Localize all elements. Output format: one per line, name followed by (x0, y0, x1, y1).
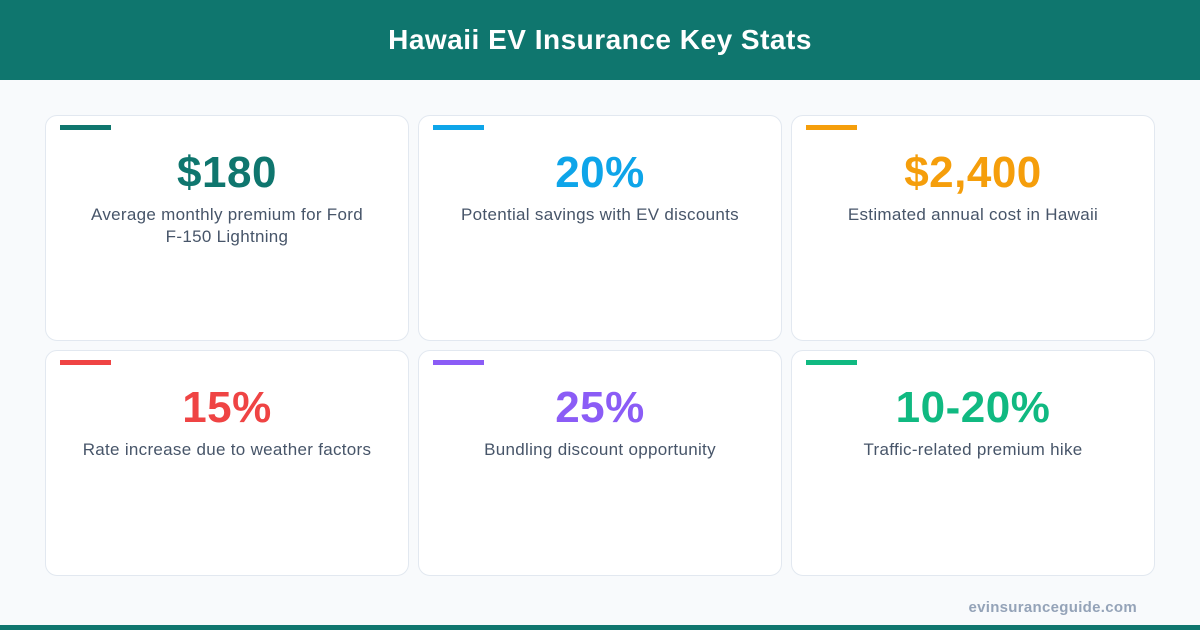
card: 15%: Rate increase due to weather factors (83, 440, 371, 459)
card: 20%: 20% (555, 148, 645, 197)
card: 25%: Bundling discount opportunity (484, 440, 716, 459)
card: 10-20%: Traffic-related premium hike (863, 440, 1083, 459)
card: $180: $180 (177, 148, 277, 197)
header: Hawaii EV Insurance Key Stats (388, 24, 812, 55)
header (0, 0, 1200, 80)
card: 20% (418, 115, 782, 341)
card: $180: Average monthly premium for Ford (91, 205, 363, 224)
card: $180: F-150 Lightning (166, 227, 288, 246)
card: $2,400: Estimated annual cost in Hawaii (848, 205, 1098, 224)
card: 15%: 15% (182, 383, 272, 432)
card: 15% (45, 350, 409, 576)
card: 25% (418, 350, 782, 576)
card: 20%: Potential savings with EV discounts (461, 205, 739, 224)
card: $180 (45, 115, 409, 341)
card: $2,400: $2,400 (904, 148, 1042, 197)
card: 10-20% (791, 350, 1155, 576)
card: 25%: 25% (555, 383, 645, 432)
card: $2,400 (791, 115, 1155, 341)
card: 10-20%: 10-20% (896, 383, 1050, 432)
footer source: evinsuranceguide.com (968, 599, 1137, 616)
